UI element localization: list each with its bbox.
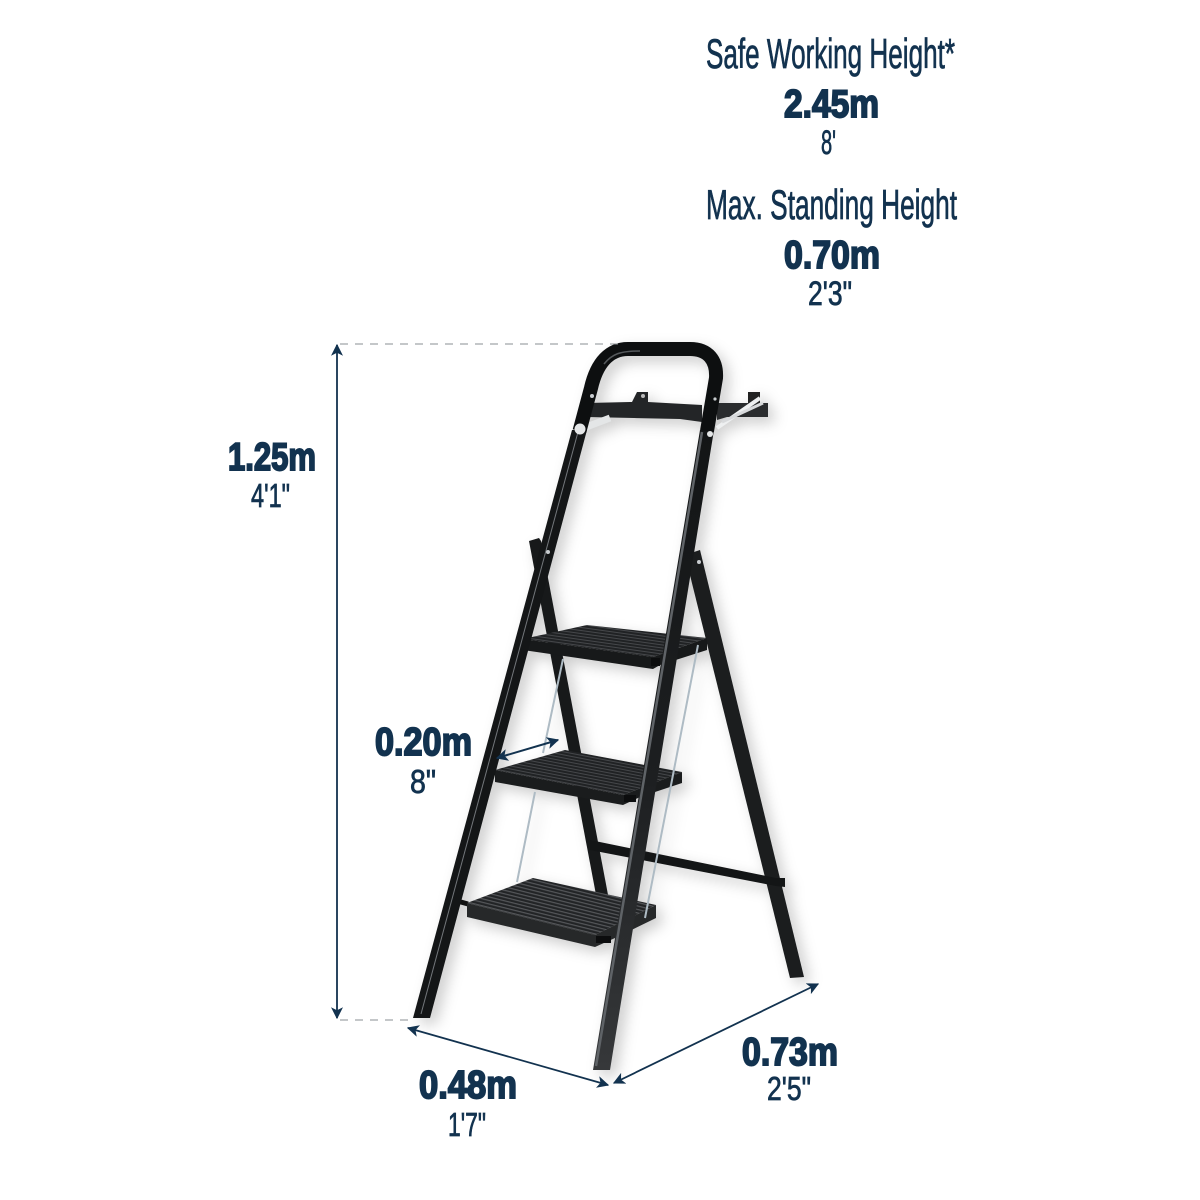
middle step	[483, 750, 682, 805]
heading: safe working height: 8'	[821, 124, 836, 162]
back right leg	[685, 550, 804, 978]
ladder illustration	[413, 349, 804, 1070]
width label: 1'7"	[448, 1106, 486, 1143]
heading: safe working height	[706, 30, 955, 162]
heading: safe working height: Safe Working Height*	[706, 30, 955, 77]
heading: max standing height: Max. Standing Height	[706, 181, 957, 228]
heading: safe working height: 2.45m	[784, 83, 879, 126]
lower cross bar	[590, 840, 785, 887]
arm pivots	[574, 424, 713, 437]
top step	[523, 625, 707, 669]
heading: max standing height: 2'3"	[808, 275, 852, 313]
front right rail	[593, 430, 714, 1070]
depth dimension arrow	[614, 984, 818, 1083]
depth label: 2'5"	[767, 1070, 811, 1107]
back left leg	[529, 538, 609, 900]
width label: 0.48m	[419, 1064, 517, 1107]
handle arch	[580, 349, 716, 431]
support cables	[517, 645, 698, 918]
height dimension arrow	[337, 344, 620, 1020]
tread depth label: 8"	[410, 763, 436, 800]
tread depth label	[375, 721, 472, 800]
tread depth arrow	[497, 740, 558, 758]
bolts	[546, 394, 717, 564]
width dimension arrow	[408, 1028, 608, 1085]
height label: 4'1"	[251, 477, 290, 514]
depth label: 0.73m	[742, 1031, 838, 1074]
width label	[419, 1064, 517, 1143]
heading: max standing height	[706, 181, 957, 313]
bottom step	[450, 878, 656, 947]
heading: max standing height: 0.70m	[784, 234, 880, 277]
tread depth label: 0.20m	[375, 721, 472, 764]
depth label	[742, 1031, 838, 1107]
height label	[228, 436, 316, 514]
rear tray and brackets	[581, 392, 768, 429]
front left rail	[413, 430, 587, 1018]
height label: 1.25m	[228, 436, 316, 479]
